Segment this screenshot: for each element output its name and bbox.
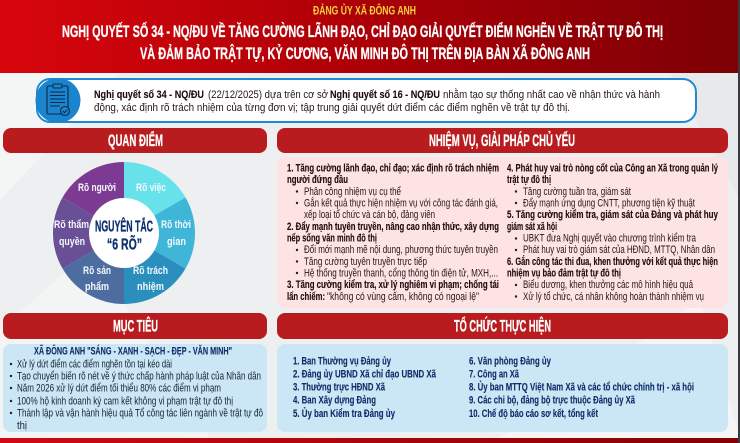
heading: tổ chức thực hiện — [277, 313, 728, 339]
donut chart: 6 rõ: Rõ trách — [133, 265, 168, 277]
tasks column 1: người đứng đầu — [287, 174, 348, 186]
implementation list 1: 3. Thường trực HĐND Xã — [293, 382, 386, 394]
donut chart: 6 rõ: gian — [167, 236, 186, 248]
implementation list 2: 10. Chế độ báo cáo sơ kết, tổng kết — [469, 408, 598, 420]
goals card — [3, 344, 267, 432]
tasks column 1 — [287, 162, 499, 303]
tasks column 2: Tăng cường tuần tra, giám sát — [523, 186, 631, 198]
tasks column 1: 1. Tăng cường lãnh đạo, chỉ đạo; xác định rõ trách nhiệm — [287, 162, 499, 174]
panel: mục tiêu — [3, 313, 267, 432]
intro text: (22/12/2025) dựa trên cơ sở — [208, 89, 328, 101]
tasks column 1: nếp sống văn minh đô thị — [287, 232, 377, 244]
tasks column 2: nhiệm vụ bảo đảm trật tự đô thị — [507, 268, 621, 280]
heading: mục tiêu: MỤC TIÊU — [113, 316, 158, 336]
goals card: Thành lập và vận hành hiệu quả Tổ công tác liên ngành về trật tự đô — [17, 408, 263, 420]
donut centre label: NGUYÊN TẮC — [95, 216, 153, 236]
goals card: XÃ ĐÔNG ANH "SÁNG - XANH - SẠCH - ĐẸP - VĂN MINH" — [34, 344, 232, 358]
panel: tổ chức thực hiện — [277, 313, 728, 432]
heading: quan điểm — [3, 128, 267, 153]
footer band — [0, 438, 740, 443]
tasks column 2 — [507, 162, 719, 303]
tasks column 1: 3. Tăng cường kiểm tra, xử lý nghiêm vi phạm; chống tái — [287, 279, 499, 291]
tasks column 1: "không có vùng cấm, không có ngoại lệ" — [327, 291, 479, 303]
intro text: Nghị quyết số 16 - NQ/ĐU — [330, 89, 440, 101]
intro text: nhằm tạo sự thống nhất cao về nhận thức và hành — [443, 88, 660, 101]
goals card: Xử lý dứt điểm các điểm nghẽn tồn tại kéo dài — [17, 358, 172, 370]
donut chart: 6 rõ: nhiệm — [137, 281, 164, 293]
donut chart: 6 rõ: Rõ người — [78, 182, 116, 194]
heading: nhiệm vụ — [277, 128, 728, 153]
task card — [277, 157, 728, 308]
tasks column 2: giám sát xã hội — [507, 221, 557, 233]
tasks column 1: Gắn kết quả thực hiện nhiệm vụ với công tác đánh giá, — [304, 196, 498, 210]
implementation list 2 — [469, 356, 694, 420]
tasks column 1: Hệ thống truyền thanh, cổng thông tin điện tử, MXH,... — [304, 268, 498, 280]
donut chart: 6 rõ: Rõ thời — [161, 219, 191, 231]
goals card: Năm 2026 xử lý dứt điểm tối thiểu 80% các điểm vi phạm — [17, 382, 221, 394]
implementation list 2: 7. Công an Xã — [469, 368, 520, 380]
tasks column 1: lấn chiếm: — [287, 291, 325, 303]
implementation list 2: 6. Văn phòng Đảng ủy — [469, 356, 552, 368]
implementation list 2: 9. Các chi bộ, đảng bộ trực thuộc Đảng ủy Xã — [469, 394, 636, 406]
intro text: Nghị quyết số 34 - NQ/ĐU — [94, 89, 204, 101]
tasks column 1: 2. Đẩy mạnh tuyên truyền, nâng cao nhận thức, xây dựng — [287, 221, 499, 233]
donut centre label — [95, 216, 153, 254]
heading: mục tiêu — [3, 313, 267, 339]
panel: quan điểm — [3, 128, 267, 304]
implementation list 1: 5. Ủy ban Kiểm tra Đảng ủy — [293, 407, 396, 420]
donut centre label: “6 RÕ” — [107, 234, 142, 254]
intro text — [94, 88, 660, 114]
implementation card — [277, 344, 728, 432]
implementation list 1: 2. Đảng ủy UBND Xã chỉ đạo UBND Xã — [293, 368, 437, 380]
implementation list 1: 4. Ban Xây dựng Đảng — [293, 394, 376, 406]
donut chart: 6 rõ: Rõ việc — [136, 182, 166, 194]
implementation list 1 — [293, 356, 437, 420]
donut chart: 6 rõ — [53, 162, 195, 304]
organisation name: ĐẢNG ỦY XÃ ĐÔNG ANH — [313, 2, 416, 18]
tasks column 1: xếp loại tổ chức và cán bộ, đảng viên — [304, 209, 435, 221]
intro callout — [36, 78, 696, 123]
tasks column 1: Phân công nhiệm vụ cụ thể — [304, 186, 401, 198]
panel: nhiệm vụ, giải pháp chủ yếu — [277, 128, 728, 308]
heading: nhiệm vụ: NHIỆM VỤ, GIẢI PHÁP CHỦ YẾU — [429, 131, 575, 150]
implementation list 1: 1. Ban Thường vụ Đảng ủy — [293, 356, 392, 368]
header band — [0, 0, 740, 73]
donut chart: 6 rõ: Rõ thẩm — [54, 219, 89, 231]
goals card: thị — [17, 420, 27, 432]
heading: quan điểm: QUAN ĐIỂM — [108, 131, 163, 150]
heading: tổ chức thực hiện: TỔ CHỨC THỰC HIỆN — [454, 316, 551, 336]
tasks column 1: Tăng cường tuyên truyền trực tiếp — [304, 256, 427, 268]
tasks column 1: Đổi mới mạnh mẽ nội dung, phương thức tuyên truyền — [304, 244, 498, 256]
right edge strip — [738, 0, 740, 443]
icon: clipboard with check — [36, 78, 80, 123]
tasks column 2: trật tự đô thị — [507, 174, 551, 186]
goals card: Tạo chuyển biến rõ nét về ý thức chấp hành pháp luật của Nhân dân — [17, 370, 261, 382]
intro text: động, xác định rõ trách nhiệm của từng đơn vị; tập trung giải quyết dứt điểm các điểm nghẽn về trật tự đô thị. — [94, 102, 570, 114]
donut chart: 6 rõ: quyền — [59, 236, 85, 248]
donut chart: 6 rõ: Rõ sản — [83, 265, 111, 277]
donut chart: 6 rõ: phẩm — [85, 281, 109, 293]
goals card: 100% hộ kinh doanh ký cam kết không vi phạm trật tự đô thị — [17, 396, 233, 408]
